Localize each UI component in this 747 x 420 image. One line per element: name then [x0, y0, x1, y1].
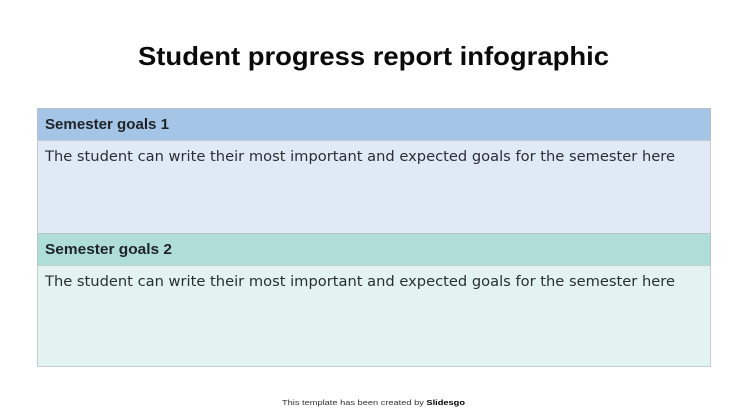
panel: semester goals 1 [38, 108, 710, 234]
body: semester goals 1: The student can write their most important and expected goals for the semester here [44, 149, 675, 165]
header: semester goals 2 [38, 234, 710, 266]
header: semester goals 1 [38, 108, 710, 140]
table: semester goals [38, 108, 710, 366]
title: Student progress report infographic [138, 41, 609, 71]
footer credit: This template has been created by Slidesgo [282, 398, 466, 407]
body: semester goals 1 [38, 140, 710, 234]
panel: semester goals 2 [38, 234, 710, 366]
body: semester goals 2: The student can write their most important and expected goals for the semester here [44, 274, 675, 290]
body: semester goals 2 [38, 266, 710, 366]
header: semester goals 2: Semester goals 2 [45, 242, 172, 258]
header: semester goals 1: Semester goals 1 [45, 117, 169, 133]
